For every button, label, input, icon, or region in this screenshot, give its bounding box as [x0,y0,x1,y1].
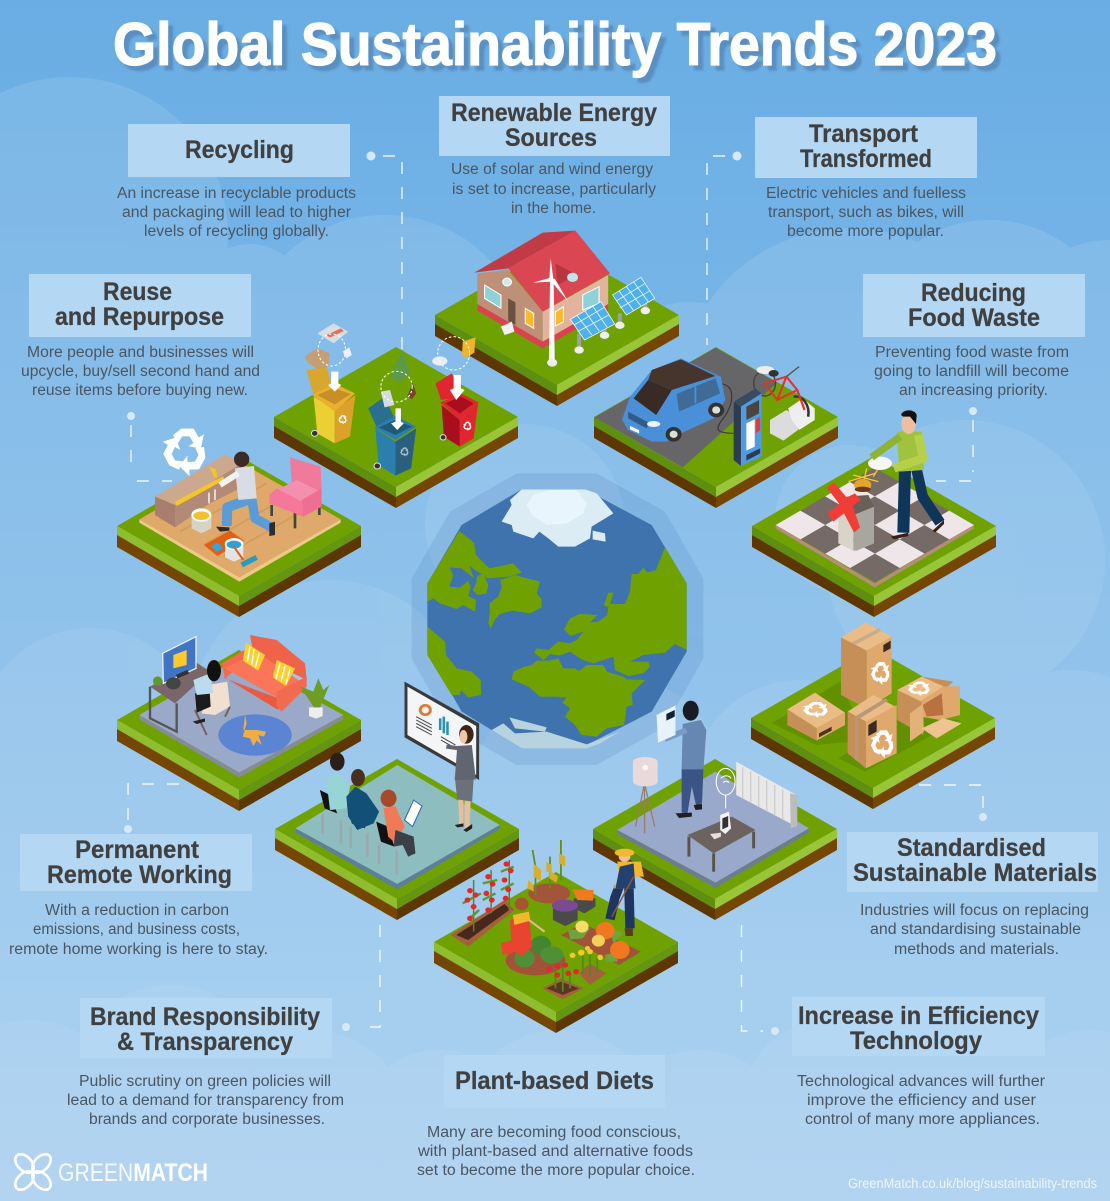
bicycle [754,366,808,417]
text: renewable energy [451,161,656,217]
asphalt [594,348,777,467]
blue rug with cat [218,714,292,756]
text: plant-based diets: Many are becoming food conscious, [427,1124,681,1141]
text: food waste: going to landfill will become [874,363,1069,380]
text: recycling: levels of recycling globally. [144,223,329,240]
panel: efficiency technology [792,997,1045,1128]
floor [617,772,809,888]
audience seated [320,753,422,874]
vegetable buckets [552,889,595,926]
heading: efficiency technology: Technology [850,1027,982,1055]
whiteboard [405,682,479,780]
connector: remote working [124,784,180,833]
heading: renewable energy [439,96,670,156]
heading: renewable energy: Renewable Energy [451,99,657,127]
text: efficiency technology: Technological advances will further [797,1073,1045,1090]
heading: standardised materials: Sustainable Materials [853,859,1097,887]
panel: standardised materials [847,832,1098,958]
text: reuse: More people and businesses will [27,344,254,361]
text: brand responsibility [67,1073,344,1128]
ocean [427,489,687,748]
text: brand responsibility: brands and corporate businesses. [89,1111,325,1128]
text: efficiency technology: improve the efficiency and user [807,1092,1036,1109]
panel: recycling [117,124,356,240]
text: transport: transport, such as bikes, will [768,204,964,221]
platform: reuse and repurpose [117,429,361,617]
heading: transport: Transport [809,120,919,148]
red bin [432,337,479,447]
text: remote working: With a reduction in carbon [45,902,229,919]
pumpkin bed [561,921,641,965]
heading: food waste: Reducing [921,279,1026,307]
text: reuse: reuse items before buying new. [32,382,248,399]
heading: efficiency technology [792,997,1045,1056]
floor lamp [633,757,658,833]
ice caps [492,489,620,748]
house [474,231,610,348]
panel: renewable energy [439,96,670,217]
person painting [209,452,275,536]
text: renewable energy: is set to increase, particularly [452,181,656,198]
heading: transport [755,117,977,178]
heading: food waste [863,274,1085,337]
heading: plant-based diets [444,1055,665,1108]
front box [848,695,897,768]
solar panels [570,277,655,354]
heading: transport: Transformed [800,145,932,173]
heading: reuse [29,274,251,337]
open box [897,677,962,742]
panel: transport [755,117,977,240]
connector: transport [707,152,742,345]
charging station [734,388,762,466]
text: brand responsibility: lead to a demand for transparency from [67,1092,344,1109]
heading: remote working: Permanent [75,836,200,864]
text: standardised materials: and standardising sustainable [870,921,1081,938]
platform: brand responsibility [275,682,519,920]
globe [412,473,703,765]
presenter [446,725,476,832]
heading: brand responsibility [80,998,332,1058]
man with tablet [657,701,706,818]
wordmark: GREENMATCH [58,1159,208,1187]
text: plant-based diets: set to become the more popular choice. [417,1162,695,1179]
platform: remote working [117,635,361,811]
text: remote working: emissions, and business costs, [33,921,240,938]
floor [139,658,343,777]
red cross [827,483,861,533]
panel: reuse [21,274,260,399]
panel: food waste [863,274,1085,399]
heading: standardised materials [847,832,1098,892]
electric car [622,358,735,442]
desk and computer [150,637,210,732]
tall box [841,623,892,708]
yellow bin [305,323,355,443]
farmer with rake [610,849,644,936]
heading: efficiency technology: Increase in Efficiency [798,1002,1039,1030]
text: remote working [9,902,268,958]
text: food waste: an increasing priority. [899,382,1048,399]
text: standardised materials: Industries will focus on replacing [860,902,1089,919]
small box [787,693,845,741]
panel: brand responsibility [67,998,344,1128]
heading: standardised materials: Standardised [897,834,1046,862]
heading: remote working [20,834,252,891]
text: reuse: upcycle, buy/sell second hand and [21,363,260,380]
connector: standardised [915,785,987,821]
heading: food waste: Food Waste [908,304,1040,332]
wifi symbol [716,768,735,808]
heading: recycling [128,124,350,177]
text: recycling: An increase in recyclable products [117,185,356,202]
connector: reuse [127,412,172,481]
tomato bed [451,860,514,947]
wooden floor [139,462,341,582]
flower boxes [543,946,606,999]
text: transport: become more popular. [787,223,944,240]
heading: reuse: Reuse [103,278,172,306]
wind turbine [533,258,568,367]
text: standardised materials [860,902,1089,958]
text: plant-based diets [417,1124,695,1179]
heading: plant-based diets: Plant-based Diets [455,1067,654,1095]
text: plant-based diets: with plant-based and alternative foods [417,1143,693,1160]
text: recycling: and packaging will lead to higher [122,204,351,221]
gardener kneeling [501,898,545,956]
text: efficiency technology [797,1073,1045,1128]
bike rack [770,398,815,441]
woman at desk [193,660,230,735]
platform: transport [594,347,838,508]
platform: renewable energy [435,231,679,406]
text: remote working: remote home working is here to stay. [9,941,268,958]
paint cans and tools [191,508,257,565]
text: standardised materials: methods and materials. [894,941,1059,958]
globe halo [412,473,703,765]
text: renewable energy: Use of solar and wind energy [451,161,653,178]
platform: efficiency technology [593,701,837,920]
person scraping plate [872,410,944,539]
cabinet [155,454,242,527]
heading: renewable energy: Sources [505,124,597,152]
text: brand responsibility: Public scrutiny on green policies will [79,1073,331,1090]
text: food waste: Preventing food waste from [875,344,1069,361]
blue bin [368,350,416,476]
platform: plant-based diets [434,840,678,1033]
title: Global Sustainability Trends 2023 [113,11,997,78]
platform: standardised materials [751,623,995,809]
checkered floor [776,468,974,587]
connector: food waste [936,407,977,481]
text: food waste [874,344,1069,399]
recycling symbol [158,429,209,479]
potted plant [300,678,329,719]
falling food [848,457,892,492]
continents [427,531,687,737]
panel: remote working [9,834,268,958]
text: transport [766,185,966,240]
waste bin [838,495,874,551]
heading: brand responsibility: & Transparency [117,1028,293,1056]
corn plants [527,840,570,903]
connector: efficiency [742,925,779,1035]
text: efficiency technology: control of many more appliances. [805,1111,1040,1128]
heading: remote working: Remote Working [47,861,232,889]
radiator [736,762,797,828]
panel: plant-based diets [417,1055,695,1179]
coffee table with smart hub [687,812,755,872]
text: reuse [21,344,260,399]
platform: recycling [274,323,518,508]
source url: GreenMatch.co.uk/blog/sustainability-trends [848,1176,1097,1191]
sofa [222,635,307,712]
logo: GreenMatch [12,1151,208,1193]
text: recycling [117,185,356,240]
melon bed [506,936,565,975]
text: transport: Electric vehicles and fuelless [766,185,966,202]
teal floor [295,765,500,889]
connector: brand [342,925,380,1031]
heading: brand responsibility: Brand Responsibility [90,1003,320,1031]
pink armchair [269,457,322,528]
icon: clover [12,1151,54,1193]
heading: recycling: Recycling [185,136,294,164]
connector: recycling [366,152,402,350]
shadows [772,682,960,772]
heading: reuse: and Repurpose [55,303,224,331]
text: renewable energy: in the home. [511,200,596,217]
platform: food waste [752,410,996,617]
